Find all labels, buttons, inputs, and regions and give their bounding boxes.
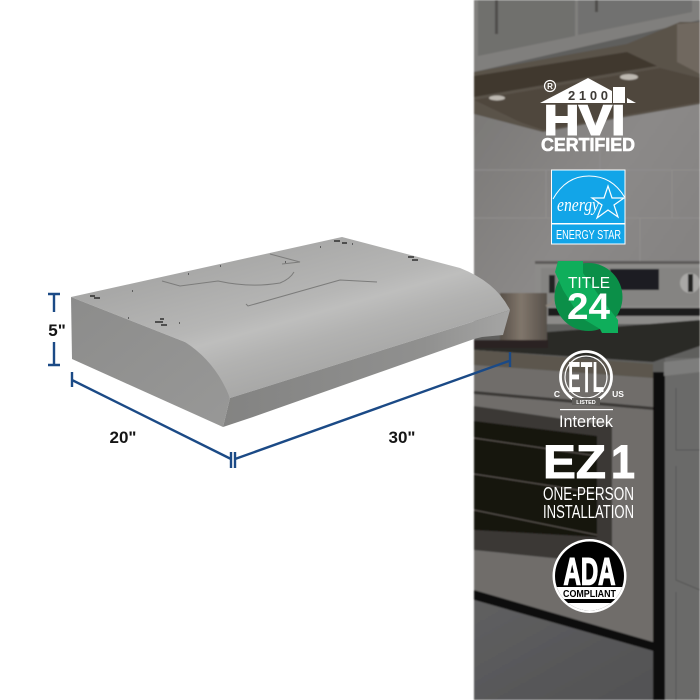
logo: ETL listed Intertek: C <box>554 389 560 399</box>
hood side face <box>71 297 230 427</box>
logo: Title 24 <box>554 261 622 333</box>
pot <box>474 293 553 348</box>
range hood in photo <box>474 22 700 132</box>
dimension: width <box>235 352 510 468</box>
logo: Energy Star: energy <box>557 195 599 216</box>
logo: HVI certified: CERTIFIED <box>541 135 635 155</box>
logo: EZ1 one-person installation: EZ <box>543 435 606 488</box>
dimension lines <box>48 294 510 468</box>
logo: EZ1 one-person installation: INSTALLATION <box>543 502 634 522</box>
logo: Energy Star: ENERGY STAR <box>556 228 621 242</box>
upper cabinets <box>474 0 700 72</box>
logo: ETL listed Intertek: Intertek <box>559 412 613 431</box>
logo: HVI certified: HVI <box>544 96 625 144</box>
logo: ETL listed Intertek: LISTED <box>576 400 596 406</box>
logo: EZ1 one-person installation: ONE-PERSON <box>543 484 634 504</box>
hood top and curved front <box>71 237 510 398</box>
dimension: depth <box>72 372 231 468</box>
logo: ETL listed Intertek <box>554 352 624 431</box>
logo: EZ1 one-person installation: 1 <box>611 435 635 488</box>
logo: ETL listed Intertek: US <box>612 389 624 399</box>
hood lower face <box>223 310 510 427</box>
logo: Title 24: 24 <box>567 286 610 327</box>
label: 20 inches: 20" <box>110 428 136 447</box>
oven front <box>474 350 653 700</box>
speckles <box>128 244 353 323</box>
dimension: height <box>48 294 60 365</box>
logo: HVI certified <box>540 78 636 155</box>
logo: ADA compliant: ADA <box>564 552 616 594</box>
range hood product <box>71 237 510 427</box>
tiled backsplash <box>474 104 700 300</box>
logo: HVI certified: R <box>547 82 553 91</box>
mounting holes <box>90 241 418 325</box>
top panel outlines <box>162 254 377 306</box>
kitchen photo <box>474 0 700 700</box>
logo: ADA compliant: COMPLIANT <box>563 589 616 600</box>
logo: Energy Star <box>552 170 625 244</box>
label: 5 inches: 5" <box>48 321 66 340</box>
logo: ADA compliant <box>550 539 630 613</box>
stove back panel <box>535 261 700 324</box>
label: 30 inches: 30" <box>389 428 415 447</box>
dark gap and side cabinet <box>653 358 700 700</box>
logo: HVI certified: 2100 <box>568 88 608 103</box>
logo: ETL listed Intertek: ETL <box>568 353 604 402</box>
logo: EZ1 one-person installation <box>543 435 635 522</box>
logo: Title 24: TITLE <box>568 275 610 292</box>
cooktop <box>474 320 700 362</box>
